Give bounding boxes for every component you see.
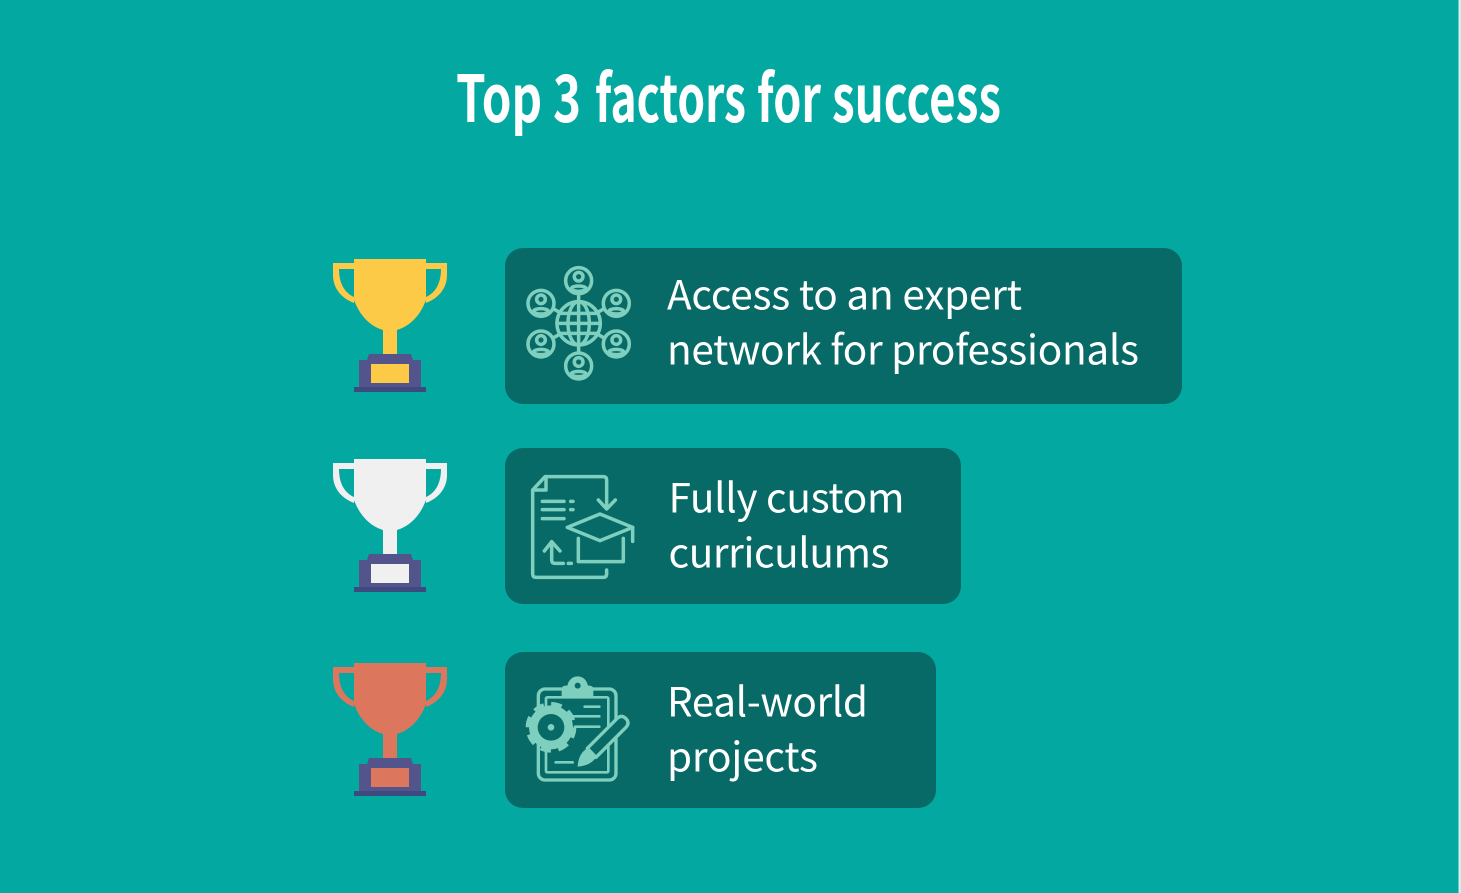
title: factors xyxy=(595,47,746,141)
text: factor 2: curriculums xyxy=(668,520,890,579)
trophy: gold xyxy=(333,259,447,392)
icon: clipboard, gear and pencil xyxy=(528,676,628,780)
trophy: bronze xyxy=(333,663,447,796)
icon: globe network xyxy=(528,268,629,379)
panel: expert network xyxy=(505,248,1182,404)
title: Top 3 xyxy=(456,47,581,141)
title: success xyxy=(832,47,1001,141)
text: factor 2: Fully custom xyxy=(668,465,904,524)
text: factor 3: projects xyxy=(667,724,818,783)
title: for xyxy=(757,47,821,141)
icon: curriculum and graduation cap xyxy=(533,477,633,577)
text: factor 1: Access to an expert xyxy=(667,262,1022,321)
text: factor 3: Real-world xyxy=(667,669,868,728)
text: factor 1: network for professionals xyxy=(667,317,1139,376)
panel: real-world projects xyxy=(505,652,936,808)
panel: custom curriculums xyxy=(505,448,961,604)
trophy: silver xyxy=(333,459,447,592)
